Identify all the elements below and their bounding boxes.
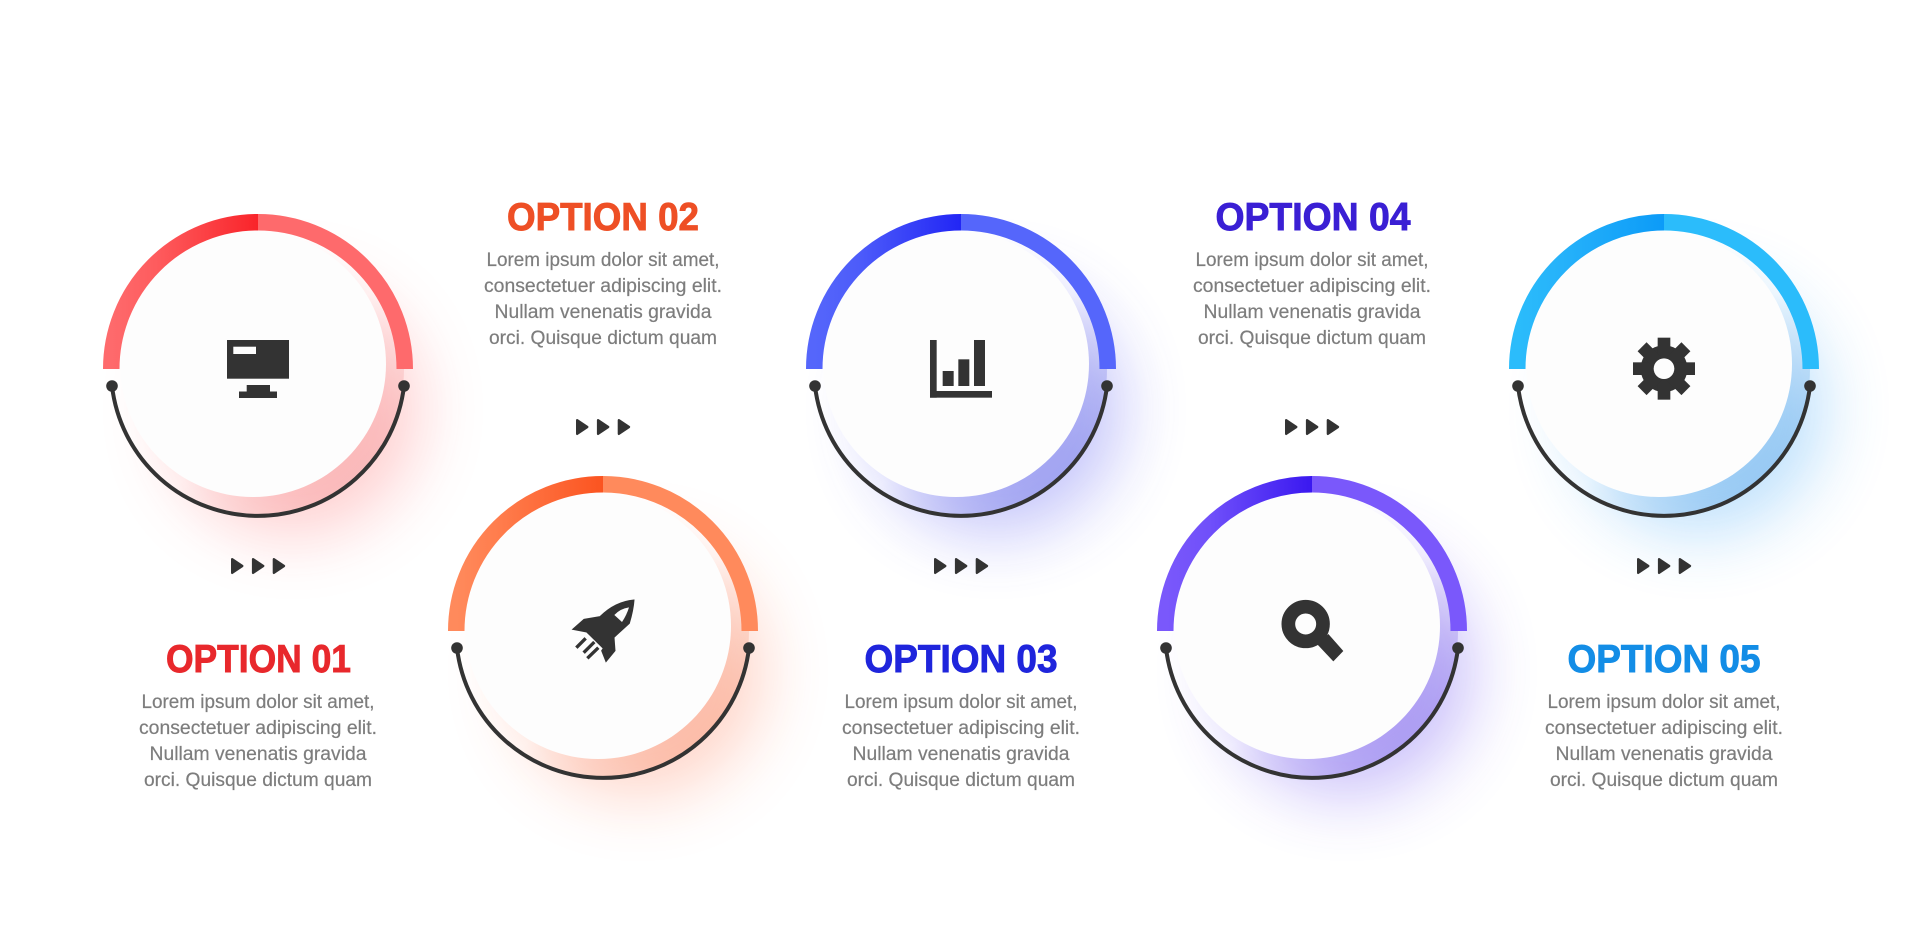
body: option 04: Nullam venenatis gravida	[1204, 302, 1421, 323]
arrows: option 04	[1286, 420, 1338, 434]
icon: gear	[1633, 338, 1695, 400]
dark lower arc 02	[451, 642, 755, 778]
soft shadow 03	[871, 284, 1121, 534]
body: option 05: consectetuer adipiscing elit.	[1545, 718, 1783, 739]
panel: option 03 circle	[809, 222, 1121, 534]
icon: bar chart	[930, 340, 992, 398]
heading: option 04: OPTION 04	[1216, 196, 1411, 239]
white disc 03	[823, 231, 1089, 497]
inner shadow ring 01	[112, 223, 404, 515]
body: option 02: Nullam venenatis gravida	[494, 302, 712, 323]
white disc 05	[1526, 231, 1792, 497]
white disc 01	[120, 231, 386, 497]
body: option 03: Nullam venenatis gravida	[852, 744, 1070, 765]
arrows: option 01	[232, 559, 284, 573]
icon: monitor	[227, 340, 289, 398]
body: option 05: orci. Quisque dictum quam	[1550, 770, 1778, 791]
arrows: option 05	[1638, 559, 1690, 573]
panel: option 01 circle	[106, 222, 418, 534]
text block: option 04	[1193, 196, 1431, 349]
body: option 03	[842, 692, 1080, 791]
soft shadow 05	[1574, 284, 1824, 534]
coloured arc 02	[456, 484, 750, 631]
inner shadow ring 05	[1518, 223, 1810, 515]
body: option 04: Lorem ipsum dolor sit amet,	[1196, 250, 1428, 271]
coloured arc 03	[814, 222, 1108, 369]
inner shadow ring 03	[815, 223, 1107, 515]
dark lower arc 03	[809, 380, 1113, 516]
heading: option 05: OPTION 05	[1568, 638, 1760, 681]
body: option 02: orci. Quisque dictum quam	[489, 328, 717, 349]
soft shadow 04	[1222, 546, 1472, 796]
text block: option 03	[842, 638, 1080, 791]
white disc 04	[1174, 493, 1440, 759]
body: option 01: Lorem ipsum dolor sit amet,	[142, 692, 374, 713]
text block: option 05	[1545, 638, 1783, 791]
icon: rocket	[573, 600, 634, 662]
icon: magnifier	[1288, 607, 1343, 661]
body: option 01: consectetuer adipiscing elit.	[139, 718, 377, 739]
coloured arc 04	[1165, 484, 1459, 631]
coloured arc 01	[111, 222, 405, 369]
panel: option 02 circle	[451, 484, 763, 796]
body: option 04	[1193, 250, 1431, 349]
body: option 04: consectetuer adipiscing elit.	[1193, 276, 1431, 297]
body: option 04: orci. Quisque dictum quam	[1198, 328, 1426, 349]
body: option 05	[1545, 692, 1783, 791]
heading: option 02: OPTION 02	[507, 196, 699, 239]
dark lower arc 01	[106, 380, 410, 516]
body: option 01: Nullam venenatis gravida	[150, 744, 367, 765]
body: option 01: orci. Quisque dictum quam	[144, 770, 372, 791]
dark lower arc 05	[1512, 380, 1816, 516]
text block: option 02	[484, 196, 722, 349]
arrows: option 02	[577, 420, 629, 434]
coloured arc 05	[1517, 222, 1811, 369]
panel: option 04 circle	[1160, 484, 1472, 796]
white disc 02	[465, 493, 731, 759]
inner shadow ring 04	[1166, 485, 1458, 777]
body: option 05: Nullam venenatis gravida	[1556, 744, 1773, 765]
panel: option 05 circle	[1512, 222, 1824, 534]
body: option 05: Lorem ipsum dolor sit amet,	[1548, 692, 1780, 713]
soft shadow 02	[513, 546, 763, 796]
inner shadow ring 02	[457, 485, 749, 777]
text block: option 01	[139, 638, 377, 791]
body: option 03: Lorem ipsum dolor sit amet,	[844, 692, 1078, 713]
body: option 03: consectetuer adipiscing elit.	[842, 718, 1080, 739]
body: option 01	[139, 692, 377, 791]
heading: option 03: OPTION 03	[864, 638, 1058, 681]
body: option 02: Lorem ipsum dolor sit amet,	[486, 250, 720, 271]
soft shadow 01	[168, 284, 418, 534]
body: option 02	[484, 250, 722, 349]
arrows: option 03	[935, 559, 987, 573]
heading: option 01: OPTION 01	[166, 638, 351, 681]
body: option 02: consectetuer adipiscing elit.	[484, 276, 722, 297]
dark lower arc 04	[1160, 642, 1464, 778]
body: option 03: orci. Quisque dictum quam	[847, 770, 1075, 791]
